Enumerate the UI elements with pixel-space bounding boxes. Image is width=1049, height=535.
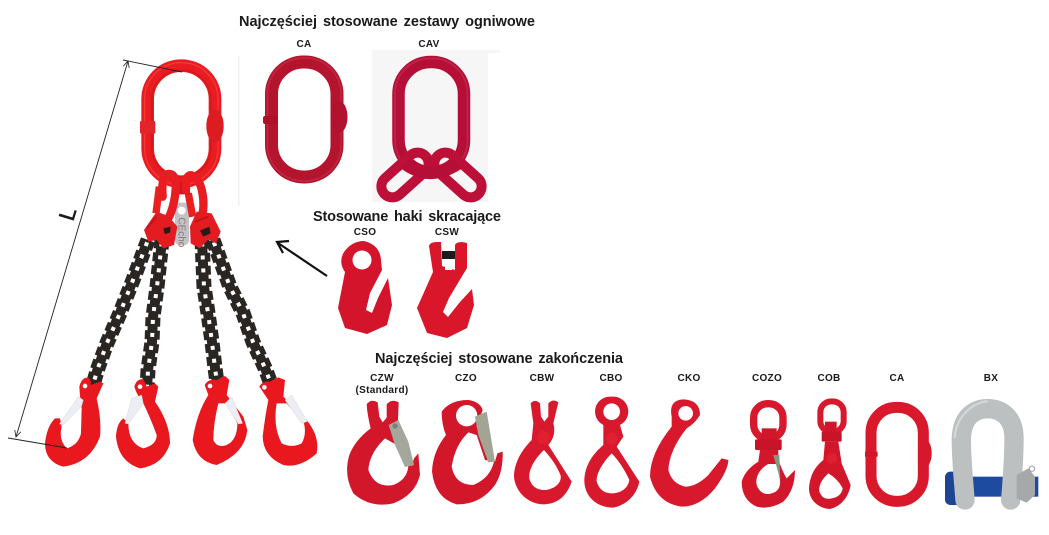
grey tag: [175, 203, 189, 248]
dimension label: L: [54, 204, 81, 223]
product: COB swivel hook: [809, 401, 851, 509]
product: CBW hook: [514, 401, 572, 504]
product: CBO hook: [584, 397, 639, 508]
product: CSO hook: [338, 241, 392, 334]
arrow to shortening hooks position: [277, 241, 327, 276]
hook 4: [259, 377, 317, 466]
heading: shortening hooks: Stosowane haki skracające: [313, 209, 501, 225]
lifting hooks: [45, 376, 317, 468]
label Standard: (Standard): [356, 385, 408, 396]
lower link shanks: [156, 187, 193, 217]
end fittings left group: [347, 397, 639, 508]
heading: end fittings: Najczęściej stosowane zakończenia: [375, 351, 624, 367]
label BX: BX: [984, 373, 998, 384]
label CSW: CSW: [435, 227, 459, 238]
couplers: [144, 212, 177, 248]
product: COZO swivel hook: [742, 404, 795, 508]
label CBW: CBW: [530, 373, 555, 384]
label CKO: CKO: [677, 373, 701, 384]
intermediate links: [162, 174, 176, 220]
grey tag: CEcho: [176, 217, 187, 248]
chains: [92, 240, 274, 392]
product: CZW hook: [347, 401, 420, 505]
label CZW: CZW: [370, 373, 394, 384]
product: CKO hook: [650, 399, 728, 507]
dimension line L: [8, 60, 182, 448]
product: CAV master link assembly: [377, 58, 486, 202]
label CZO: CZO: [455, 373, 477, 384]
end fittings right group: [650, 399, 1038, 509]
hook 1: [45, 378, 103, 467]
product: BX shackle: [945, 401, 1038, 505]
product: CA master link: [263, 58, 348, 181]
label COZO: COZO: [752, 373, 782, 384]
product: CZO hook: [432, 400, 503, 504]
master link: [140, 63, 224, 194]
label CSO: CSO: [354, 227, 376, 238]
chain sling assembly: [45, 63, 317, 468]
label CBO: CBO: [599, 373, 623, 384]
label COB: COB: [817, 373, 841, 384]
product: CA link: [865, 407, 932, 501]
label CA: CA: [296, 39, 312, 50]
product: CSW hook: [417, 242, 474, 338]
label CA fitting: CA: [889, 373, 905, 384]
hook 2: [116, 379, 170, 468]
panel: CAV photo background: [238, 50, 500, 206]
heading: link sets: Najczęściej stosowane zestawy ogniwowe: [239, 14, 535, 30]
master link and couplers: [140, 63, 224, 248]
hook 3: [193, 376, 247, 465]
label CAV: CAV: [418, 39, 440, 50]
